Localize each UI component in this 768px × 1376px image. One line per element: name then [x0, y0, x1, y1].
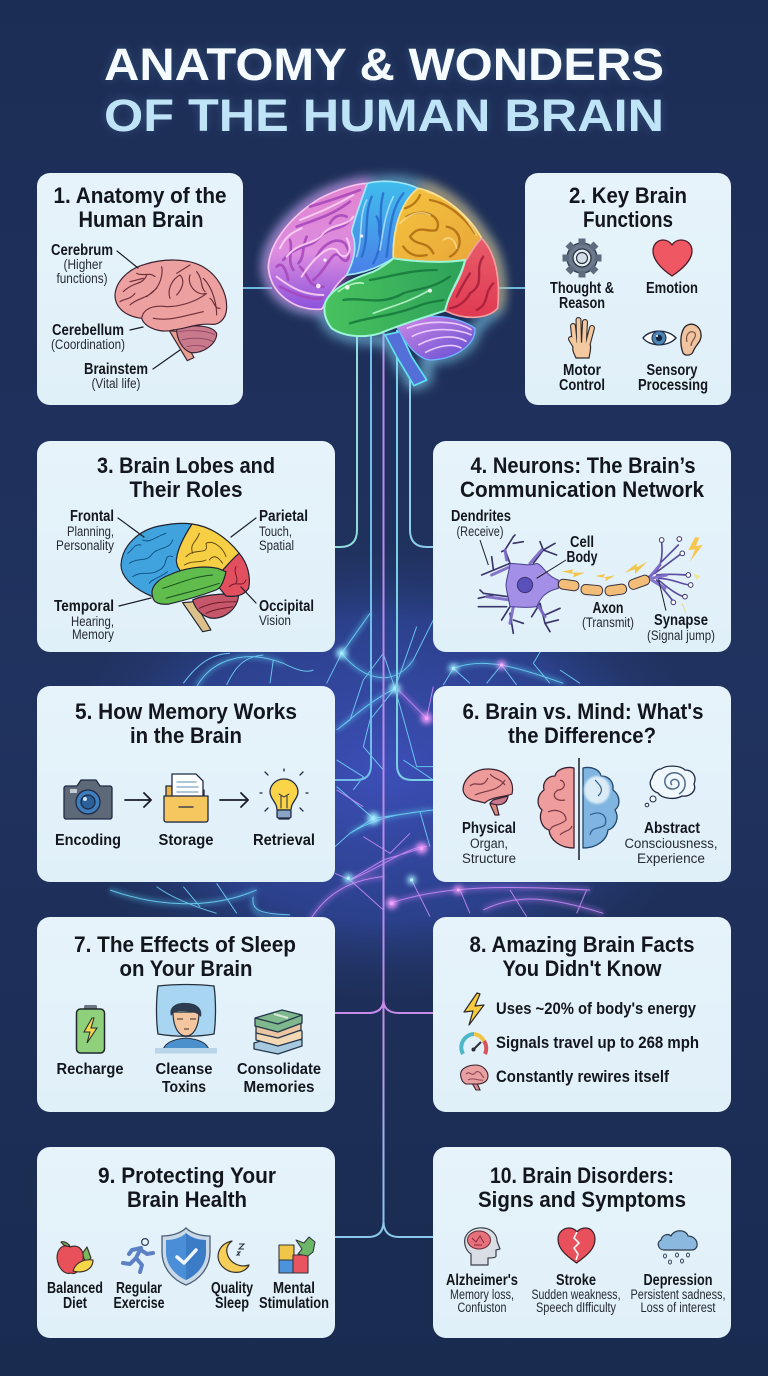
- title: OF THE HUMAN BRAIN: [104, 89, 664, 141]
- function labels: [550, 280, 708, 394]
- heading 1: Human Brain: [78, 207, 204, 232]
- icon: rain cloud: [658, 1231, 697, 1264]
- icon: physical brain: [463, 769, 513, 815]
- panel: 1 anatomy: [37, 173, 243, 405]
- disorder labels: Depression: [644, 1272, 712, 1289]
- protection labels: Stimulation: [259, 1295, 329, 1312]
- lobe labels: Parietal: [259, 508, 308, 525]
- neuron labels: Cell: [570, 534, 594, 551]
- neuron labels: Dendrites: [451, 508, 511, 525]
- protection labels: Mental: [273, 1280, 315, 1297]
- icon: apple: [57, 1242, 93, 1274]
- heading 7: on Your Brain: [120, 956, 252, 981]
- coloured lobes brain: [121, 523, 249, 632]
- lobe labels: Touch,: [259, 524, 292, 539]
- icon: runner: [123, 1239, 153, 1272]
- lobe labels: Vision: [259, 613, 291, 628]
- icon: books: [254, 1010, 302, 1054]
- disorder labels: Sudden weakness,: [532, 1287, 620, 1302]
- function labels: Sensory: [646, 362, 698, 379]
- heading 10: Signs and Symptoms: [478, 1187, 686, 1212]
- icon: sleeping person: [155, 984, 217, 1054]
- icon: head with brain: [465, 1228, 500, 1265]
- function labels: Reason: [559, 295, 605, 312]
- sleep labels: Recharge: [56, 1061, 124, 1078]
- neuron diagram: [478, 535, 703, 633]
- function labels: Processing: [638, 377, 708, 394]
- heading 1: [54, 183, 226, 232]
- leader lines: [118, 518, 256, 606]
- icon: thought bubble: [645, 766, 695, 807]
- disorder labels: Alzheimer's: [446, 1272, 518, 1289]
- icon: moon: [218, 1241, 249, 1272]
- disorder labels: Memory loss,: [450, 1287, 514, 1302]
- heading 4: Communication Network: [460, 477, 705, 502]
- neuron labels: [451, 508, 715, 643]
- heading 6: the Difference?: [508, 723, 656, 748]
- icon: light bulb: [260, 769, 308, 819]
- disorder labels: [446, 1272, 726, 1315]
- arrow: [220, 793, 248, 807]
- sleep labels: Toxins: [162, 1079, 206, 1096]
- panel: 10 disorders: [433, 1147, 731, 1338]
- labels: [51, 242, 148, 391]
- title: [104, 38, 664, 141]
- yellow lobe: [393, 188, 482, 262]
- heading 8: 8. Amazing Brain Facts: [470, 932, 694, 957]
- labels: Cerebellum: [52, 322, 124, 339]
- function labels: Motor: [563, 362, 601, 379]
- title: ANATOMY & WONDERS: [104, 38, 664, 90]
- protection labels: Sleep: [215, 1295, 249, 1312]
- lobe labels: Planning,: [67, 524, 114, 539]
- heading 4: 4. Neurons: The Brain’s: [470, 453, 696, 478]
- labels: Brainstem: [84, 361, 148, 378]
- title: OF THE HUMAN BRAIN: [104, 90, 664, 141]
- heading 3: [97, 453, 275, 502]
- heading 3: 3. Brain Lobes and: [97, 453, 275, 478]
- icon: folder: [164, 774, 208, 822]
- panel: 2 functions: [525, 173, 731, 405]
- cerebellum: [395, 316, 475, 360]
- function labels: Thought &: [550, 280, 614, 297]
- vs labels: Organ,: [470, 836, 508, 851]
- facts text: Signals travel up to 268 mph: [496, 1034, 699, 1052]
- icon: camera: [64, 780, 112, 819]
- lobe labels: Hearing,: [71, 614, 114, 629]
- heading 3: Their Roles: [130, 477, 242, 502]
- arrow: [125, 793, 151, 807]
- lobe labels: Occipital: [259, 598, 314, 615]
- neuron labels: Body: [566, 549, 598, 566]
- panel: 3 lobes: [37, 441, 335, 652]
- icon: hand: [571, 320, 592, 358]
- sleep labels: Consolidate: [237, 1061, 321, 1078]
- function labels: Control: [559, 377, 605, 394]
- heading 5: 5. How Memory Works: [75, 699, 297, 724]
- panel: 6 brain vs mind: [433, 686, 731, 882]
- icon: broken heart: [558, 1228, 595, 1263]
- vs labels: Experience: [637, 851, 705, 866]
- lobe labels: Personality: [56, 538, 114, 553]
- facts text: Uses ~20% of body's energy: [496, 1000, 697, 1018]
- heading 10: [478, 1163, 686, 1212]
- memory labels: Retrieval: [253, 832, 315, 849]
- heading 8: You Didn't Know: [502, 956, 662, 981]
- lobe labels: Spatial: [259, 538, 294, 553]
- vs labels: Consciousness,: [624, 836, 718, 851]
- icon: small brain: [461, 1065, 488, 1090]
- heading 7: 7. The Effects of Sleep: [74, 932, 296, 957]
- neuron labels: (Signal jump): [647, 628, 715, 643]
- neuron labels: Synapse: [654, 612, 708, 629]
- protection labels: Balanced: [47, 1280, 103, 1297]
- vs labels: Physical: [462, 820, 516, 837]
- icon: heart: [653, 240, 692, 276]
- vs labels: [462, 820, 718, 866]
- icon: half brains: [538, 758, 619, 860]
- icon: lightning: [464, 993, 484, 1025]
- icon: gear: [562, 238, 602, 278]
- heading 9: Brain Health: [127, 1187, 247, 1212]
- protection labels: Exercise: [114, 1295, 165, 1312]
- labels: (Coordination): [51, 337, 125, 352]
- icon: shield: [162, 1228, 210, 1285]
- protection labels: [47, 1280, 329, 1312]
- protection labels: Regular: [116, 1280, 162, 1297]
- disorder labels: Persistent sadness,: [630, 1287, 726, 1302]
- panel: 8 facts: [433, 917, 731, 1112]
- leader lines: [117, 251, 180, 369]
- sulci: [277, 190, 360, 299]
- brainstem: [385, 332, 427, 386]
- green lobe: [324, 258, 465, 336]
- panel: 4 neurons: [433, 441, 731, 652]
- icon: eye and ear: [643, 324, 701, 355]
- icon: puzzle: [279, 1237, 315, 1273]
- sleep labels: Cleanse: [156, 1061, 213, 1078]
- heading 10: 10. Brain Disorders:: [490, 1163, 674, 1188]
- central rainbow brain: [268, 181, 499, 386]
- heading 9: 9. Protecting Your: [98, 1163, 276, 1188]
- vs labels: Structure: [462, 851, 516, 866]
- labels: (Higher: [64, 257, 103, 272]
- heading 8: [470, 932, 694, 981]
- icon: battery: [76, 1005, 104, 1053]
- labels: (Vital life): [92, 376, 140, 391]
- lobe labels: [54, 508, 314, 642]
- lobe labels: Temporal: [54, 598, 114, 615]
- neuron labels: (Transmit): [582, 615, 634, 630]
- labels: Cerebrum: [51, 242, 113, 259]
- heading 5: in the Brain: [130, 723, 242, 748]
- panel: 9 protecting: [37, 1147, 335, 1338]
- title: ANATOMY & WONDERS: [104, 39, 664, 90]
- panel: 7 sleep: [37, 917, 335, 1112]
- neuron labels: (Receive): [456, 524, 504, 539]
- disorder labels: Speech dIfficulty: [536, 1300, 616, 1315]
- heading 6: 6. Brain vs. Mind: What's: [462, 699, 704, 724]
- heading 2: Functions: [583, 207, 673, 232]
- panel: 5 memory: [37, 686, 335, 882]
- blue lobe: [347, 181, 418, 275]
- disorder labels: Stroke: [556, 1272, 596, 1289]
- neural network background: [110, 613, 603, 920]
- heading 5: [75, 699, 297, 748]
- function labels: Emotion: [646, 280, 698, 297]
- memory labels: Encoding: [55, 832, 121, 849]
- connector lines: [243, 288, 525, 1237]
- pink brain illustration: [115, 260, 227, 361]
- heading 4: [460, 453, 705, 502]
- neuron labels: Axon: [592, 600, 624, 617]
- heading 2: 2. Key Brain: [569, 183, 687, 208]
- protection labels: Quality: [211, 1280, 253, 1297]
- red lobe: [445, 238, 498, 317]
- pink frontal lobe: [268, 183, 367, 309]
- labels: functions): [56, 271, 108, 286]
- disorder labels: Loss of interest: [640, 1300, 716, 1315]
- sleep labels: [56, 1061, 321, 1096]
- sleep labels: Memories: [244, 1079, 314, 1096]
- heading 6: [462, 699, 704, 748]
- heading 1: 1. Anatomy of the: [54, 183, 226, 208]
- heading 2: [569, 183, 687, 232]
- vs labels: Abstract: [644, 820, 700, 837]
- facts text: [496, 1000, 699, 1086]
- heading 7: [74, 932, 296, 981]
- memory labels: Storage: [158, 832, 214, 849]
- icon: gauge: [461, 1034, 486, 1054]
- protection labels: Diet: [63, 1295, 87, 1312]
- facts text: Constantly rewires itself: [496, 1068, 669, 1086]
- heading 9: [98, 1163, 276, 1212]
- lobe labels: Memory: [72, 627, 114, 642]
- lobe labels: Frontal: [70, 508, 114, 525]
- disorder labels: Confuston: [458, 1300, 506, 1315]
- memory labels: [55, 832, 315, 849]
